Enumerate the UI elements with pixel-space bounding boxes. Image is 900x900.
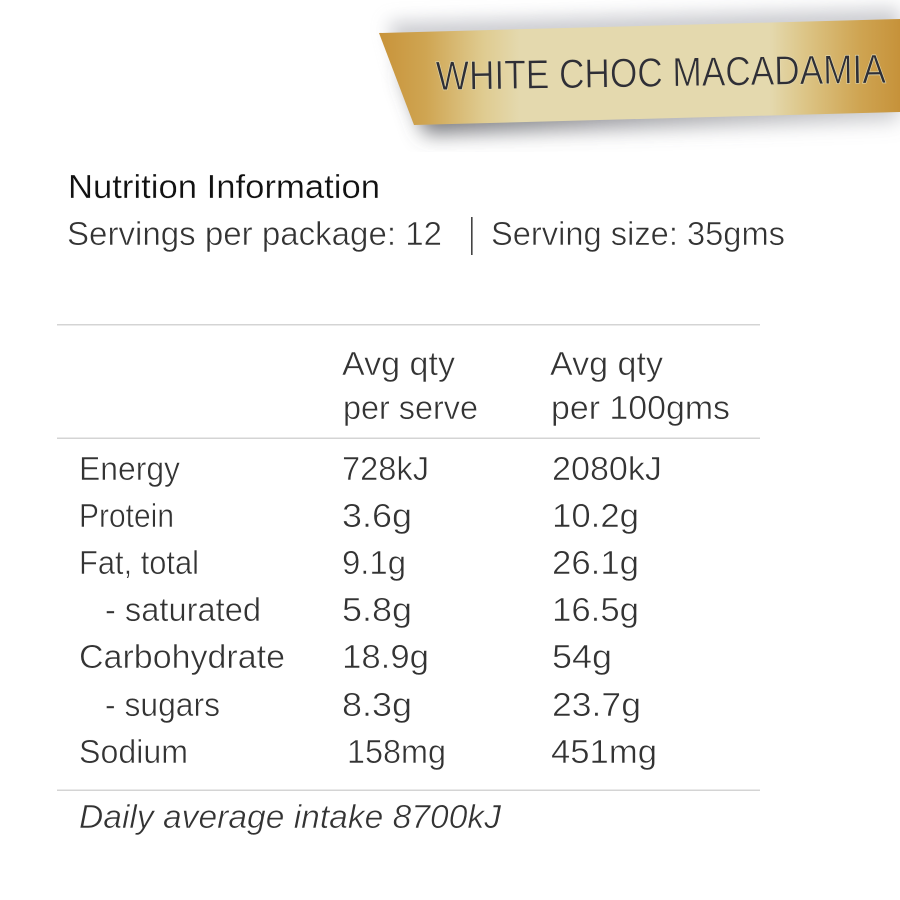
row: fat, total: 26.1g: [552, 544, 639, 581]
row: carbohydrate: 54g: [552, 638, 612, 675]
serving information: [67, 215, 785, 255]
nutrient table rows: [79, 450, 662, 770]
serving information: Serving size: 35gms: [491, 215, 785, 252]
row: saturated: 16.5g: [552, 591, 639, 628]
row: sodium: Sodium: [79, 733, 188, 770]
column heading: per 100gms: [550, 345, 730, 426]
row: fat, total: 9.1g: [342, 544, 406, 581]
row: carbohydrate: Carbohydrate: [79, 638, 285, 675]
row: protein: [79, 497, 639, 534]
row: protein: 10.2g: [552, 497, 639, 534]
row: energy: 728kJ: [342, 450, 429, 487]
daily intake note: Daily average intake 8700kJ: [79, 798, 501, 835]
row: protein: Protein: [79, 497, 174, 534]
title: Nutrition Information: [68, 168, 380, 205]
row: sugars: - sugars: [105, 686, 220, 723]
row: sugars: 23.7g: [552, 686, 641, 723]
row: carbohydrate: 18.9g: [342, 638, 429, 675]
row: energy: Energy: [79, 450, 180, 487]
row: energy: 2080kJ: [552, 450, 662, 487]
row: saturated: 5.8g: [342, 591, 412, 628]
column heading: per 100gms: Avg qty: [550, 345, 664, 382]
row: sodium: [79, 733, 657, 770]
row: saturated: [105, 591, 639, 628]
row: sugars: [105, 686, 641, 723]
column heading: per serve: Avg qty: [342, 345, 456, 382]
row: fat, total: [79, 544, 639, 581]
row: carbohydrate: [79, 638, 612, 675]
serving information: Servings per package: 12: [67, 215, 442, 252]
column heading: per 100gms: per 100gms: [551, 389, 730, 426]
row: sodium: 158mg: [347, 733, 446, 770]
row: saturated: - saturated: [105, 591, 261, 628]
row: sodium: 451mg: [551, 733, 657, 770]
ribbon shadow: [388, 8, 900, 134]
row: fat, total: Fat, total: [79, 544, 199, 581]
row: protein: 3.6g: [342, 497, 412, 534]
column heading: per serve: [342, 345, 478, 426]
column heading: per serve: per serve: [343, 389, 478, 426]
ribbon band: [379, 19, 900, 125]
row: energy: [79, 450, 662, 487]
ribbon banner: [379, 8, 900, 134]
row: sugars: 8.3g: [342, 686, 412, 723]
